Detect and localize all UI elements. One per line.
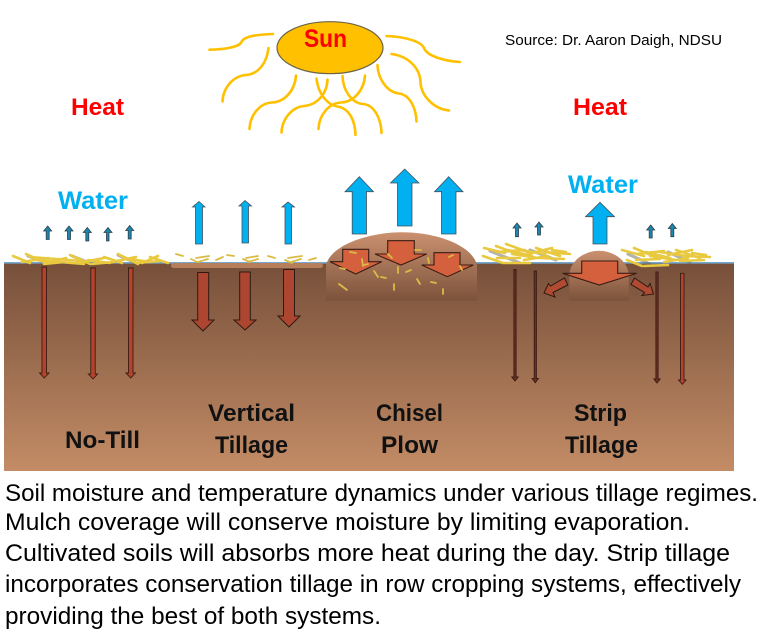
chisel plow heat arrows <box>330 241 473 277</box>
chisel plow water arrows <box>345 169 463 234</box>
caption text block: incorporates conservation tillage in row cropping systems, effectively <box>5 571 741 598</box>
strip tillage side heat arrows <box>544 278 654 297</box>
chisel plow label line two: Plow <box>381 432 438 459</box>
sun rays <box>210 34 460 135</box>
caption text block: Cultivated soils will absorbs more heat during the day. Strip tillage <box>5 540 730 567</box>
strip tillage right residue pile <box>622 248 710 266</box>
chisel plow label: Chisel <box>376 400 443 427</box>
panel: no-till <box>13 226 168 454</box>
water label left: Water <box>58 187 128 215</box>
strip tillage label: Strip <box>574 400 627 427</box>
water label right: Water <box>568 171 638 199</box>
strip tillage tilled mound <box>569 251 629 301</box>
no-till label: No-Till <box>65 427 140 454</box>
strip tillage small water arrows <box>513 222 676 238</box>
vertical tillage heat arrows <box>192 270 300 331</box>
heat label left: Heat <box>71 94 124 121</box>
soil cross-section <box>4 262 734 471</box>
caption text block <box>5 480 758 630</box>
sun <box>210 22 460 135</box>
panel: chisel plow <box>326 169 477 459</box>
vertical tillage surface mound <box>171 263 323 268</box>
vertical tillage label line two: Tillage <box>215 432 288 459</box>
caption text block: Mulch coverage will conserve moisture by limiting evaporation. <box>5 509 690 536</box>
sun label: Sun <box>304 25 347 53</box>
panel: vertical tillage <box>171 200 323 459</box>
sun disc <box>277 22 383 74</box>
panel: strip tillage <box>483 202 710 459</box>
no-till residue <box>13 254 168 264</box>
vertical tillage residue <box>176 254 316 263</box>
vertical tillage water arrows <box>192 200 294 244</box>
chisel plow buried residue <box>339 250 462 294</box>
heat label right: Heat <box>573 94 627 121</box>
caption text block: Soil moisture and temperature dynamics under various tillage regimes. <box>5 480 758 507</box>
strip tillage central heat arrow <box>563 261 637 285</box>
caption text block: providing the best of both systems. <box>5 603 381 630</box>
strip tillage left residue pile <box>483 244 570 263</box>
vertical tillage label: Vertical <box>208 400 295 427</box>
strip tillage central water arrow <box>586 202 614 244</box>
source credit: Source: Dr. Aaron Daigh, NDSU <box>505 32 722 49</box>
strip tillage label line two: Tillage <box>565 432 638 459</box>
no-till water arrows <box>44 226 134 241</box>
no-till heat arrows <box>40 267 135 379</box>
strip tillage deep heat arrows <box>512 270 686 384</box>
chisel plow tilled mound <box>326 232 477 301</box>
